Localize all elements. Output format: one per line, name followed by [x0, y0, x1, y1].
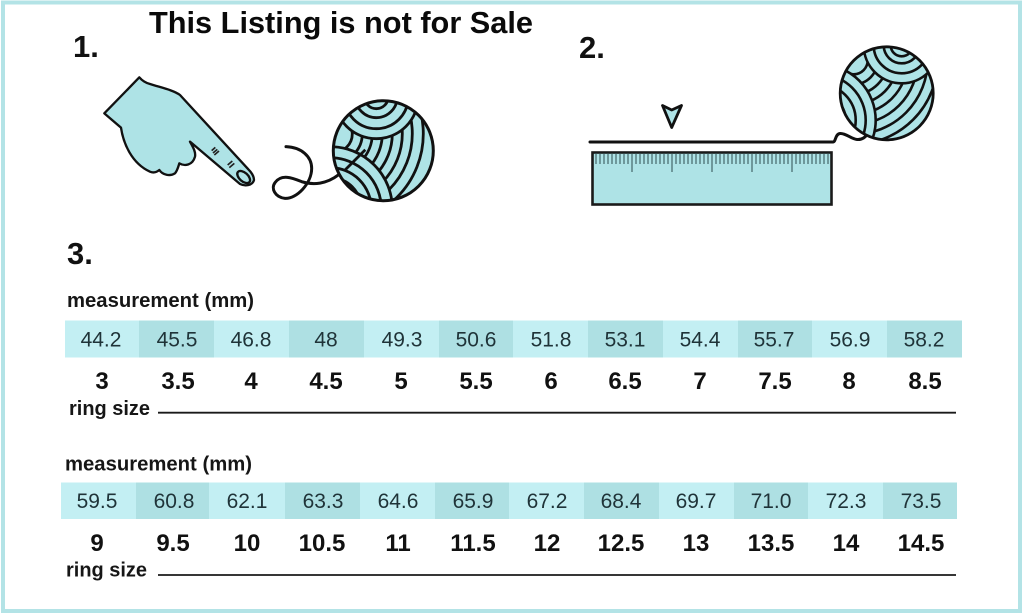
- measurement values: 67.2: [527, 490, 567, 513]
- ring sizes: 14.5: [898, 530, 944, 557]
- measurement values: 73.5: [901, 490, 941, 513]
- measurement values: 68.4: [601, 490, 642, 513]
- measurement values: 45.5: [157, 328, 197, 352]
- ring sizes: 3.5: [161, 368, 195, 395]
- measurement values: 60.8: [154, 490, 194, 513]
- ring sizes: 11.5: [450, 530, 496, 557]
- measurement values: 53.1: [605, 328, 645, 352]
- measurement band: [61, 482, 957, 519]
- ring sizes: 7: [693, 368, 707, 395]
- ring sizes: 8: [842, 368, 856, 395]
- measurement values: [77, 490, 941, 513]
- measurement band: [65, 320, 962, 358]
- measurement values: 55.7: [754, 328, 794, 352]
- ring sizes: 11: [385, 530, 411, 557]
- measurement values: 44.2: [81, 328, 121, 352]
- chart: sizes 9 to 14.5: [61, 454, 957, 582]
- ring size label: ring size: [66, 560, 147, 582]
- measurement values: 62.1: [227, 490, 267, 513]
- measurement values: 65.9: [453, 490, 493, 513]
- measurement values: 71.0: [751, 490, 791, 513]
- measurement values: [81, 328, 944, 352]
- ring sizes: 13.5: [748, 530, 794, 557]
- ring size label: ring size: [69, 398, 150, 420]
- measurement values: 46.8: [231, 328, 271, 352]
- chart: sizes 3 to 8.5: [65, 290, 962, 420]
- measurement values: 69.7: [676, 490, 716, 513]
- measurement values: 63.3: [303, 490, 343, 513]
- ring sizes: 14: [833, 530, 860, 557]
- measurement values: 56.9: [830, 328, 870, 352]
- ring sizes: 3: [95, 368, 109, 395]
- step 3 number: 3.: [67, 236, 93, 271]
- measurement values: 58.2: [904, 328, 944, 352]
- measurement values: 72.3: [826, 490, 866, 513]
- ring sizes: 6.5: [608, 368, 642, 395]
- ring sizes: 5: [394, 368, 408, 395]
- ring sizes: 6: [544, 368, 558, 395]
- measurement values: 64.6: [378, 490, 418, 513]
- measurement values: 54.4: [680, 328, 721, 352]
- measurement heading: measurement (mm): [67, 290, 254, 312]
- step 1 illustration: finger and yarn: [103, 76, 435, 202]
- step 2 illustration: thread on ruler: [588, 45, 935, 206]
- measurement values: 59.5: [77, 490, 117, 513]
- measurement heading: measurement (mm): [65, 454, 252, 476]
- step 2 number: 2.: [579, 30, 605, 65]
- measurement values: 49.3: [382, 328, 422, 352]
- ring sizes: 4: [244, 368, 258, 395]
- icon: ruler: [592, 152, 832, 204]
- icon: arrow marker: [662, 106, 682, 128]
- ring sizes: 5.5: [459, 368, 493, 395]
- ring sizes: 7.5: [758, 368, 792, 395]
- measurement values: 48: [314, 328, 338, 352]
- icon: pointing hand: [104, 77, 254, 185]
- ring sizes: 12: [534, 530, 560, 557]
- ring sizes: 4.5: [309, 368, 343, 395]
- icon: yarn ball: [332, 99, 435, 202]
- icon: yarn thread: [273, 147, 365, 198]
- ring sizes: [95, 368, 942, 395]
- ring sizes: 8.5: [908, 368, 942, 395]
- ring sizes: 10.5: [299, 530, 345, 557]
- icon: yarn ball: [838, 45, 935, 142]
- measuring thread: [590, 133, 868, 142]
- ring sizes: 9.5: [156, 530, 190, 557]
- measurement values: 50.6: [456, 328, 496, 352]
- ring sizes: 12.5: [598, 530, 644, 557]
- step 1 number: 1.: [73, 29, 99, 64]
- ring sizes: 10: [234, 530, 260, 557]
- ring sizes: [90, 530, 944, 557]
- title: This Listing is not for Sale: [149, 6, 533, 40]
- ring sizes: 9: [90, 530, 104, 557]
- ring sizes: 13: [683, 530, 709, 557]
- measurement values: 51.8: [531, 328, 571, 352]
